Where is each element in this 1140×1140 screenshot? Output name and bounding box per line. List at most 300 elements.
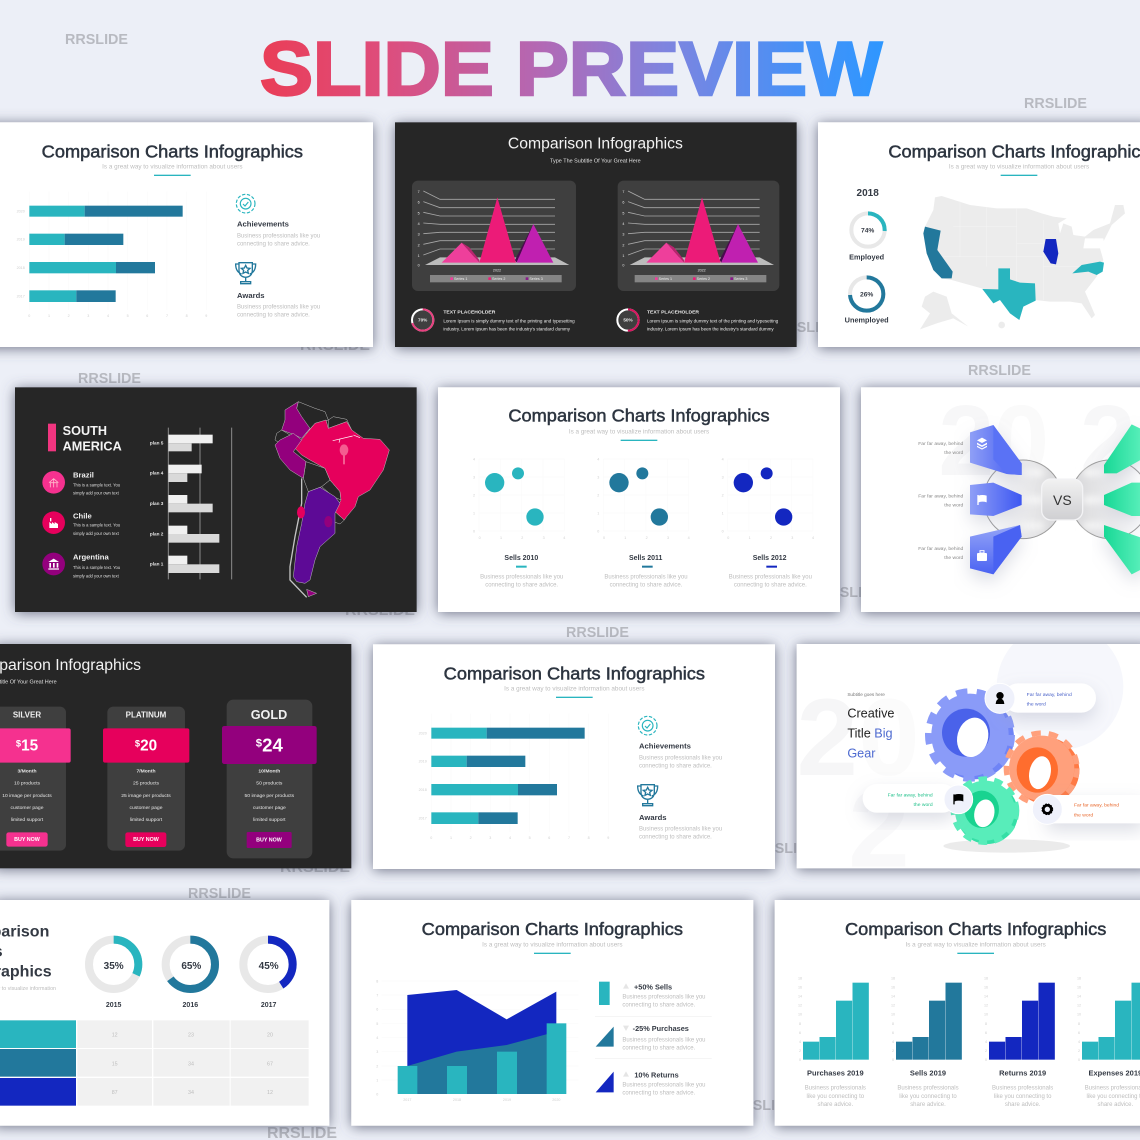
label: returns: share advice. xyxy=(1005,1102,1041,1108)
bar chart: 2020 xyxy=(17,209,25,213)
label 2011 xyxy=(604,555,688,589)
panel: bubble charts slide xyxy=(438,387,840,612)
icon: trophy xyxy=(638,785,658,806)
awards text: Awards xyxy=(639,813,667,822)
bubble chart 2010 xyxy=(473,457,565,540)
labels: Far far away, behind xyxy=(918,441,964,447)
combo chart: 2018 xyxy=(453,1098,461,1102)
item: Chile: This is a sample text. You xyxy=(73,523,121,528)
chart: sells: 2 xyxy=(892,1049,894,1053)
chart: purchases: 2 xyxy=(799,1049,801,1053)
bubble chart 2011: 1 xyxy=(597,511,599,515)
labels: Far far away, behind xyxy=(918,493,964,499)
bar chart: 8 xyxy=(186,314,188,318)
heading: Comparison Infographics xyxy=(508,135,683,152)
background shapes: 2 xyxy=(848,768,910,891)
chart panel right: 6 xyxy=(622,201,624,205)
bar chart: 5 xyxy=(127,314,129,318)
labels xyxy=(918,441,964,561)
awards text xyxy=(639,813,722,841)
card: silver: 10 image per products xyxy=(2,793,52,799)
bar chart: 1 xyxy=(450,836,452,840)
card: silver: SILVER xyxy=(13,710,41,719)
item: Argentina: simply add your own text xyxy=(73,573,120,578)
watermarks: RRSLIDE xyxy=(819,585,882,601)
callout: bottom right: Far far away, behind xyxy=(1074,803,1119,809)
heading: Comparison Charts Infographics xyxy=(444,663,705,683)
donut 2017 xyxy=(243,940,293,1009)
subtitle: Type The Subtitle Of Your Great Here xyxy=(550,158,641,164)
watermarks: RRSLIDE xyxy=(566,625,629,641)
card: gold xyxy=(222,700,317,858)
combo chart: 2020 xyxy=(552,1098,560,1102)
table: 34 xyxy=(188,1090,194,1096)
background year xyxy=(938,385,1136,497)
card: platinum: 7/Month xyxy=(136,769,156,775)
bubble chart 2011: 3 xyxy=(667,536,669,540)
bubble chart 2011: 0 xyxy=(597,529,599,533)
stat: returns: 10% Returns xyxy=(634,1071,679,1080)
chart: sells: 4 xyxy=(892,1040,894,1044)
watermarks: RRSLIDE xyxy=(754,841,817,857)
chart: purchases: 6 xyxy=(799,1031,801,1035)
heading: Comparison Charts Infographics xyxy=(42,141,303,161)
bubble chart 2010: 3 xyxy=(543,536,545,540)
achievements text: Achievements xyxy=(237,220,289,229)
gear: green xyxy=(953,779,1018,844)
bubble chart 2011: 4 xyxy=(688,536,690,540)
chart panel left: 0 xyxy=(418,264,420,268)
stat: sells: connecting to share advice. xyxy=(622,1002,696,1008)
card: platinum: PLATINUM xyxy=(126,710,167,719)
background shapes xyxy=(800,644,1123,852)
chart: expenses: 6 xyxy=(1078,1031,1080,1035)
card: gold: 50 image per products xyxy=(245,793,295,799)
combo chart: 3 xyxy=(376,1050,378,1054)
card: gold: $ xyxy=(256,738,263,750)
bubble chart 2010: 4 xyxy=(473,457,475,461)
card: gold: GOLD xyxy=(251,708,287,722)
table: 15 xyxy=(112,1061,118,1067)
chart: expenses: 10 xyxy=(1077,1013,1081,1017)
background shapes: 2 xyxy=(797,676,858,799)
bubble chart 2012: 0 xyxy=(727,536,729,540)
callout: left: the word xyxy=(914,802,933,808)
divider xyxy=(595,1015,712,1018)
card: platinum: $ xyxy=(135,739,141,749)
callout: top xyxy=(985,683,1096,713)
panel: donut table slide xyxy=(0,900,329,1126)
text placeholder right: industry. Lorem Ipsum has been the industry's standard dummy xyxy=(647,327,775,332)
slide heading: Subtitle goes here xyxy=(847,692,885,697)
bar chart: 9 xyxy=(205,314,207,318)
chart panel left: 6 xyxy=(418,201,420,205)
bubble chart 2012: 3 xyxy=(722,475,724,479)
bubble chart 2012: 3 xyxy=(791,536,793,540)
card: gold: 10/Month xyxy=(258,769,280,775)
donut 2015: 2015 xyxy=(106,1002,122,1009)
achievements text: Achievements xyxy=(639,742,691,751)
bar chart: plans: plan 4 xyxy=(150,471,164,476)
chart panel right: 5 xyxy=(622,211,624,215)
heading xyxy=(48,424,122,454)
stat: sells: +50% Sells xyxy=(634,983,672,992)
bar chart: 8 xyxy=(588,836,590,840)
subtitle: Is a great way to visualize information about users xyxy=(905,942,1046,949)
bar chart: 6 xyxy=(146,314,148,318)
chart: purchases: 14 xyxy=(798,995,802,999)
chart: expenses: 2 xyxy=(1078,1049,1080,1053)
watermarks: RRSLIDE xyxy=(776,320,839,336)
bubble chart 2010: 0 xyxy=(473,529,475,533)
card: gold: customer page xyxy=(253,805,286,811)
watermarks: RRSLIDE xyxy=(1024,96,1087,112)
text placeholder left: Lorem Ipsum is simply dummy text of the printing and typesetting xyxy=(443,318,575,323)
awards text: Awards xyxy=(237,291,265,300)
bar chart: plans xyxy=(150,428,232,579)
combo chart: 7 xyxy=(376,993,378,997)
chart: sells: 0 xyxy=(892,1058,894,1062)
achievements text: Business professionals like you xyxy=(639,755,722,761)
item: Argentina: This is a sample text. You xyxy=(73,565,121,570)
chart panel right: Series 2 xyxy=(697,277,710,281)
bubble chart 2010: 1 xyxy=(473,511,475,515)
panel: dark pyramid charts slide xyxy=(395,122,797,347)
panel: step bar charts slide xyxy=(775,900,1140,1126)
item: Argentina xyxy=(42,552,121,578)
donut 70 percent xyxy=(412,309,433,331)
chart panel right: 2 xyxy=(622,243,624,247)
card: platinum: BUY NOW xyxy=(133,837,160,843)
card: silver: limited support xyxy=(11,817,44,823)
donut 50 percent xyxy=(617,309,639,331)
chart panel right: 0 xyxy=(622,264,624,268)
card: gold: BUY NOW xyxy=(256,838,283,844)
donut 2017: 45% xyxy=(259,961,279,972)
stat: returns xyxy=(596,1071,706,1096)
label 2011: connecting to share advice. xyxy=(610,583,683,589)
stat: sells xyxy=(599,982,706,1008)
item: Chile: simply add your own text xyxy=(73,531,120,536)
panel: big gear slide xyxy=(797,623,1140,891)
chart panel left: Series 1 xyxy=(454,277,467,281)
bubble chart 2012: 2 xyxy=(770,536,772,540)
card: platinum: limited support xyxy=(130,817,163,823)
labels: the word xyxy=(944,450,964,456)
subtitle: Is a great way to visualize information about users xyxy=(482,942,623,949)
bubble chart 2011: 4 xyxy=(597,457,599,461)
label: returns: like you connecting to xyxy=(994,1094,1052,1100)
panel: bar comparison slide copy xyxy=(373,644,775,869)
combo chart: 5 xyxy=(376,1022,378,1026)
stat: purchases: connecting to share advice. xyxy=(622,1046,696,1052)
chart: purchases: 18 xyxy=(798,976,802,980)
heading: Comparison Charts Infographics xyxy=(888,141,1140,161)
icon: trophy xyxy=(236,263,256,284)
bar chart: 0 xyxy=(430,836,432,840)
stat: purchases: -25% Purchases xyxy=(633,1024,689,1033)
chart: purchases: 0 xyxy=(799,1058,801,1062)
donut 2017: 2017 xyxy=(261,1002,277,1009)
awards text: connecting to share advice. xyxy=(639,835,712,841)
watermarks: RRSLIDE xyxy=(345,603,415,619)
watermarks: RRSLIDE xyxy=(78,371,141,387)
label 2010: Business professionals like you xyxy=(480,575,563,581)
chart panel right: Series 1 xyxy=(659,277,672,281)
label 2012: Business professionals like you xyxy=(729,575,812,581)
achievements text xyxy=(237,220,320,247)
heading: SOUTH xyxy=(63,424,107,438)
bar chart: 2018 xyxy=(419,788,427,792)
chart: returns: 2 xyxy=(985,1049,987,1053)
bubble chart 2010: 0 xyxy=(479,536,481,540)
watermarks: RRSLIDE xyxy=(188,886,251,902)
bar chart xyxy=(17,192,207,318)
subtitle: Is a great way to visualize information about users xyxy=(569,428,709,435)
chart: returns: 8 xyxy=(985,1022,987,1026)
callout: left: Far far away, behind xyxy=(888,793,933,799)
watermarks: RRSLIDE xyxy=(280,860,350,876)
watermarks: RRSLIDE xyxy=(732,1098,795,1114)
bubble chart 2012: 0 xyxy=(722,529,724,533)
panel: USA map slide xyxy=(818,122,1140,347)
table: 12 xyxy=(112,1032,118,1038)
chart: returns: 10 xyxy=(984,1013,988,1017)
donut unemployed: 26% xyxy=(860,291,873,298)
divider xyxy=(595,1057,712,1060)
chart: purchases: 10 xyxy=(798,1013,802,1017)
combo chart: 8 xyxy=(376,979,378,983)
chart panel right xyxy=(618,181,779,291)
achievements text: Business professionals like you xyxy=(237,233,320,239)
bar chart: 1 xyxy=(48,314,50,318)
chart panel right: 1 xyxy=(622,254,624,258)
background year: 0 xyxy=(993,385,1049,497)
bar chart: 2 xyxy=(470,836,472,840)
label 2011: Sells 2011 xyxy=(629,555,662,562)
labels: the word xyxy=(944,503,964,509)
combo chart: 2 xyxy=(376,1064,378,1068)
label 2010: Sells 2010 xyxy=(504,555,538,562)
chart: purchases xyxy=(798,976,869,1062)
label: returns xyxy=(992,1069,1053,1108)
chart: returns: 6 xyxy=(985,1031,987,1035)
donut 2015: 35% xyxy=(104,961,124,972)
chart: expenses: 4 xyxy=(1078,1040,1080,1044)
bubble chart 2012: 2 xyxy=(722,493,724,497)
chart: sells: 10 xyxy=(891,1013,895,1017)
label unemployed: Unemployed xyxy=(845,315,889,324)
achievements text xyxy=(639,742,722,769)
bubble chart 2012: 4 xyxy=(722,457,724,461)
bar chart: 2020 xyxy=(419,731,427,735)
chart: expenses xyxy=(1077,976,1140,1062)
card: platinum: 20 xyxy=(140,738,157,755)
subtitle: Is a great way to visualize information about users xyxy=(504,686,645,693)
chart: sells: 12 xyxy=(891,1004,895,1008)
combo chart: 6 xyxy=(376,1008,378,1012)
item: Brazil: This is a sample text. You xyxy=(73,482,121,487)
chart: sells xyxy=(891,976,962,1062)
bar chart: 2017 xyxy=(419,816,427,820)
card: silver: 10 products xyxy=(14,781,41,787)
chart: sells: 8 xyxy=(892,1022,894,1026)
slide heading: Creative xyxy=(847,706,894,720)
bubble chart 2012 xyxy=(722,457,814,540)
item: Chile xyxy=(42,511,121,536)
gear: blue xyxy=(928,692,1014,779)
table: 23 xyxy=(188,1032,194,1038)
heading: Comparison Charts Infographics xyxy=(508,406,770,426)
bar chart: 9 xyxy=(607,836,609,840)
chart: expenses: 8 xyxy=(1078,1022,1080,1026)
chart: returns: 14 xyxy=(984,995,988,999)
label: returns: Returns 2019 xyxy=(999,1069,1046,1078)
label: sells xyxy=(897,1069,959,1108)
bar chart: 2019 xyxy=(419,760,427,764)
bubble chart 2011: 2 xyxy=(597,493,599,497)
bar chart: 2018 xyxy=(17,266,25,270)
bar chart: 0 xyxy=(28,314,30,318)
label 2010: connecting to share advice. xyxy=(485,583,558,589)
label: sells: like you connecting to xyxy=(899,1094,957,1100)
watermarks: RRSLIDE xyxy=(300,338,370,354)
labels: the word xyxy=(944,555,964,561)
chart: returns: 12 xyxy=(984,1004,988,1008)
table: 12 xyxy=(267,1090,273,1096)
year: 2018 xyxy=(857,188,879,199)
label 2011: Business professionals like you xyxy=(604,575,688,581)
card: silver: 3/Month xyxy=(17,769,37,775)
heading xyxy=(0,924,52,981)
panel: dark pricing slide xyxy=(0,644,351,868)
chart panel right: 4 xyxy=(622,222,624,226)
icons on prisms xyxy=(977,438,987,561)
title: SLIDE PREVIEW xyxy=(260,27,882,112)
card: silver xyxy=(0,707,71,851)
label employed: Employed xyxy=(849,252,884,261)
stat: purchases: Business professionals like you xyxy=(622,1038,706,1044)
bar chart: 2 xyxy=(68,314,70,318)
chart: expenses: 0 xyxy=(1078,1058,1080,1062)
card: gold: 50 products xyxy=(256,781,283,787)
chart panel left: 4 xyxy=(418,222,420,226)
icon: achievement gear xyxy=(236,194,255,213)
label 2012: Sells 2012 xyxy=(753,555,787,562)
label: expenses xyxy=(1085,1069,1140,1108)
card: platinum: customer page xyxy=(130,805,163,811)
chart panel right: 2022 xyxy=(698,269,706,273)
donut unemployed xyxy=(850,277,883,311)
bar chart: plans: plan 3 xyxy=(150,501,164,506)
bar chart: plans: plan 1 xyxy=(150,561,164,566)
awards text: Business professionals like you xyxy=(639,827,722,833)
slide heading: Title Big xyxy=(847,726,893,740)
card: gold: limited support xyxy=(253,817,286,823)
callout: top: Far far away, behind xyxy=(1027,692,1072,698)
green prisms xyxy=(1104,424,1140,574)
donut 2016: 65% xyxy=(181,961,201,972)
label: sells: Business professionals xyxy=(897,1086,959,1092)
label: returns: Business professionals xyxy=(992,1086,1053,1092)
bubble chart 2012: 1 xyxy=(722,511,724,515)
combo chart: 2019 xyxy=(503,1098,511,1102)
callout: left xyxy=(863,784,973,814)
donut 70 percent: 70% xyxy=(418,318,428,323)
combo chart: 4 xyxy=(376,1036,378,1040)
bar chart: plans: plan 2 xyxy=(150,531,164,536)
panel: bar comparison slide xyxy=(0,122,373,347)
bubble chart 2011: 0 xyxy=(603,536,605,540)
chart: sells: 6 xyxy=(892,1031,894,1035)
slide heading: Gear xyxy=(847,746,875,760)
text placeholder left xyxy=(443,310,575,332)
bar chart: 3 xyxy=(489,836,491,840)
donut 2015 xyxy=(89,940,138,1009)
label 2012: connecting to share advice. xyxy=(734,583,807,589)
blue prisms xyxy=(970,425,1022,574)
item: Chile: Chile xyxy=(73,512,92,521)
label: purchases: Business professionals xyxy=(805,1086,866,1092)
chart: sells: 16 xyxy=(891,985,895,989)
labels: Far far away, behind xyxy=(918,546,964,552)
stat: returns: connecting to share advice. xyxy=(622,1090,696,1096)
label: purchases: share advice. xyxy=(818,1102,853,1108)
card: silver: 15 xyxy=(21,738,39,755)
USA map xyxy=(920,196,1125,329)
heading: Comparison Charts Infographics xyxy=(422,919,683,939)
text placeholder right: TEXT PLACEHOLDER xyxy=(647,310,699,316)
label: purchases: Purchases 2019 xyxy=(807,1069,864,1078)
chart: expenses: 12 xyxy=(1077,1004,1081,1008)
bubble chart 2012: 4 xyxy=(812,536,814,540)
panel: VS prism slide xyxy=(861,385,1140,612)
bar chart: 7 xyxy=(166,314,168,318)
chart panel left: 2022 xyxy=(493,269,501,273)
bubble chart 2010: 4 xyxy=(563,536,565,540)
item: Brazil: simply add your own text xyxy=(73,491,120,496)
chart panel left: Series 3 xyxy=(529,277,543,281)
chart panel right: Series 3 xyxy=(734,277,747,281)
panel: area and bar slide xyxy=(351,900,753,1126)
comparison circles xyxy=(984,460,1140,539)
chart panel left: 3 xyxy=(418,233,420,237)
bubble chart 2012: 1 xyxy=(749,536,751,540)
combo chart: 0 xyxy=(376,1092,378,1096)
label: purchases: like you connecting to xyxy=(807,1094,865,1100)
chart: returns: 18 xyxy=(984,976,988,980)
chart: expenses: 18 xyxy=(1077,976,1081,980)
bubble chart 2011: 3 xyxy=(597,475,599,479)
subtitle: Is a great way to visualize information about users xyxy=(949,164,1089,171)
bar chart: 4 xyxy=(509,836,511,840)
stat: sells: Business professionals like you xyxy=(622,994,706,1000)
chart panel right: 3 xyxy=(622,233,624,237)
achievements text: connecting to share advice. xyxy=(639,763,712,769)
combo chart: 2017 xyxy=(403,1098,411,1102)
card: platinum: 25 image per products xyxy=(121,793,171,799)
text placeholder left: industry. Lorem Ipsum has been the industry's standard dummy xyxy=(443,327,571,332)
bar chart: plans: plan 5 xyxy=(150,441,164,446)
bubble chart 2011: 2 xyxy=(646,536,648,540)
chart: sells: 18 xyxy=(891,976,895,980)
table: 20 xyxy=(267,1032,273,1038)
text placeholder left: TEXT PLACEHOLDER xyxy=(443,310,496,316)
item: Argentina: Argentina xyxy=(73,552,109,561)
donut 50 percent: 50% xyxy=(623,318,634,323)
table: 67 xyxy=(267,1061,273,1067)
chart: purchases: 4 xyxy=(799,1040,801,1044)
